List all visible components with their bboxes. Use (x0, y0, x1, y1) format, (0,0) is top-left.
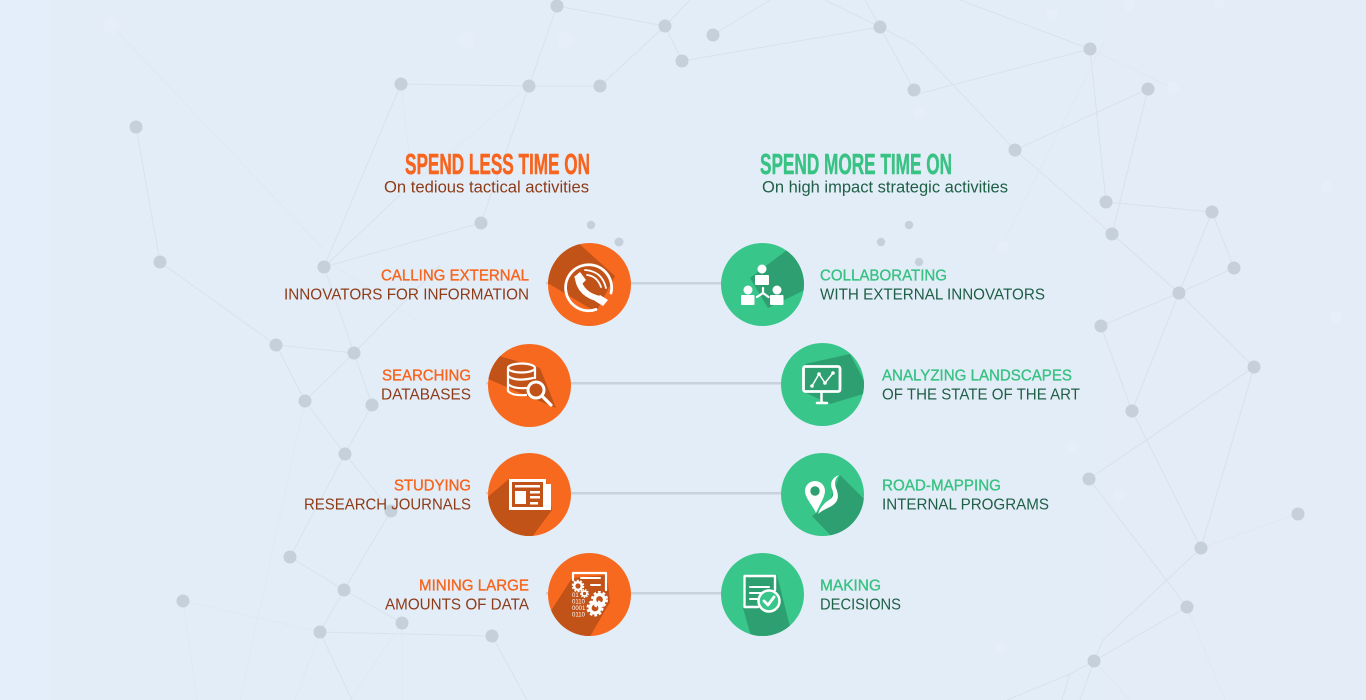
heading: spend more time on: On high impact strategic activities (762, 178, 1008, 196)
connector lines (486, 282, 786, 594)
label: calling external innovators: INNOVATORS FOR INFORMATION (284, 286, 529, 304)
label: analyzing landscapes: ANALYZING LANDSCAPES (882, 368, 1072, 384)
label: analyzing landscapes (882, 368, 1080, 404)
label: calling external innovators (284, 268, 529, 304)
label: road-mapping (882, 478, 1049, 514)
label: collaborating: WITH EXTERNAL INNOVATORS (820, 286, 1045, 304)
label: making decisions (820, 578, 901, 614)
heading: spend less time on (384, 149, 590, 196)
label: collaborating: COLLABORATING (820, 268, 947, 284)
label: calling external innovators: CALLING EXTERNAL (381, 268, 529, 284)
heading: spend less time on: SPEND LESS TIME ON (405, 149, 590, 181)
icon: phone (548, 243, 631, 326)
icon: database search (486, 344, 571, 427)
heading: spend more time on: SPEND MORE TIME ON (760, 149, 952, 181)
label: road-mapping: ROAD-MAPPING (882, 478, 1001, 494)
icon: chart monitor (781, 343, 870, 426)
icon: data mining gears: 0110 (572, 612, 586, 618)
label: studying research journals (304, 478, 471, 514)
label: studying research journals: RESEARCH JOURNALS (304, 496, 471, 514)
heading: spend more time on (760, 149, 1008, 196)
label: making decisions: MAKING (820, 578, 881, 594)
label: studying research journals: STUDYING (394, 478, 471, 494)
icon: approved document (721, 553, 804, 640)
label: mining large amounts of data (385, 578, 529, 614)
heading: spend less time on: On tedious tactical activities (384, 178, 589, 196)
label: searching databases (381, 368, 471, 404)
icon: map pin and road (781, 453, 864, 536)
icon: team collaboration (721, 243, 804, 326)
icon: newspaper (488, 453, 571, 536)
icon: data mining gears: 01 (572, 593, 579, 599)
label: searching databases: DATABASES (381, 386, 471, 404)
icon: data mining gears (548, 553, 631, 636)
label: mining large amounts of data: MINING LARGE (419, 578, 529, 594)
icon: data mining gears: 0001 (572, 606, 586, 612)
label: making decisions: DECISIONS (820, 596, 901, 614)
icon: data mining gears: 0110 (572, 600, 586, 606)
label: analyzing landscapes: OF THE STATE OF THE ART (882, 386, 1080, 404)
label: searching databases: SEARCHING (382, 368, 471, 384)
label: mining large amounts of data: AMOUNTS OF DATA (385, 596, 529, 614)
label: road-mapping: INTERNAL PROGRAMS (882, 496, 1049, 514)
label: collaborating (820, 268, 1045, 304)
